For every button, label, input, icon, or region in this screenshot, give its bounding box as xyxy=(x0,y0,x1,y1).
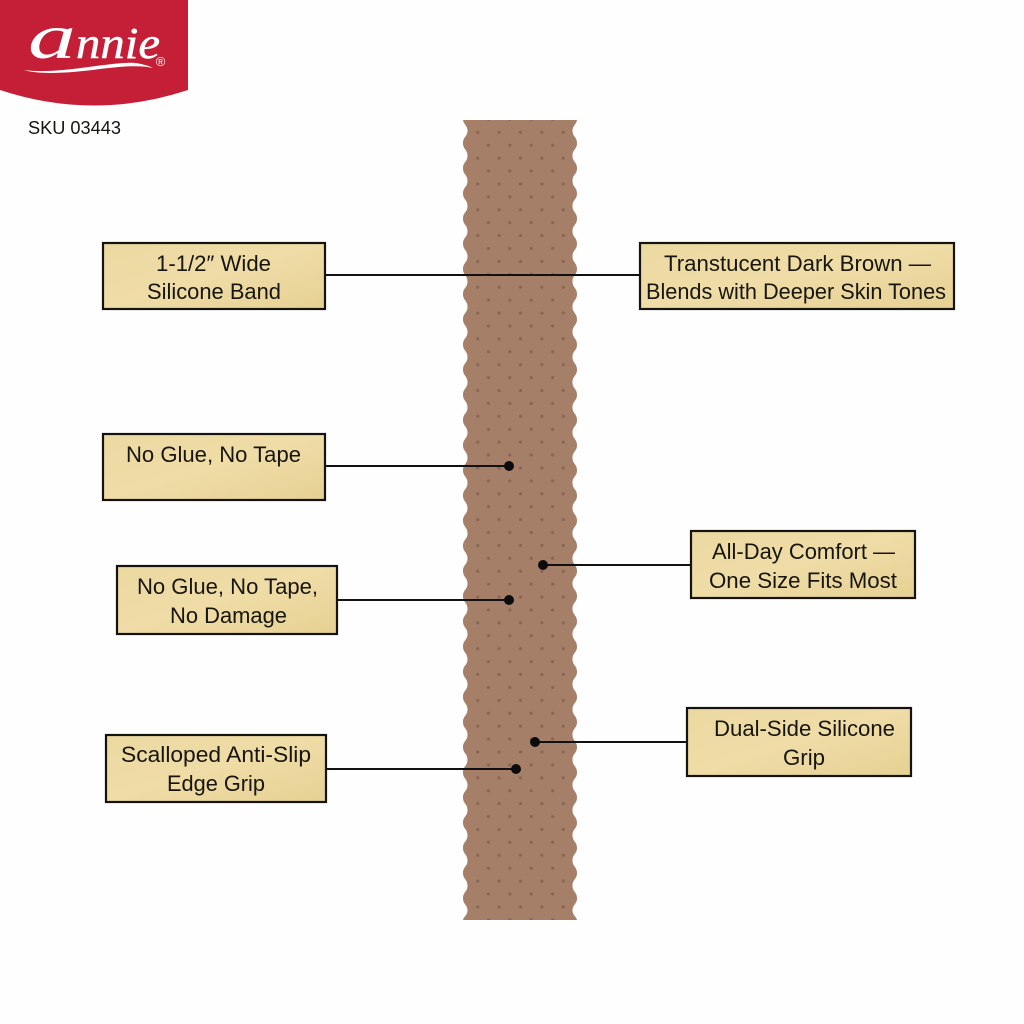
logo: Annie red badge xyxy=(0,0,188,106)
callout: dual-side silicone grip: Grip xyxy=(783,745,825,770)
silicone band with scalloped edges xyxy=(463,120,577,920)
pointer to band with dot xyxy=(325,461,514,471)
callout: 1-1/2 inch wide silicone band: Silicone Band xyxy=(147,279,281,304)
callout: scalloped anti-slip edge grip: Scalloped Anti-Slip xyxy=(121,742,311,767)
callout: scalloped anti-slip edge grip xyxy=(106,735,326,802)
callout: no glue, no tape, no damage xyxy=(117,566,337,634)
pointer to band with dot xyxy=(326,764,521,774)
logo wordmark xyxy=(28,1,160,72)
callout: all-day comfort xyxy=(691,531,915,598)
registered mark: ® xyxy=(156,54,166,69)
callout: no glue, no tape: No Glue, No Tape xyxy=(126,442,301,467)
pointer to band with dot xyxy=(530,737,687,747)
callout: scalloped anti-slip edge grip: Edge Grip xyxy=(167,771,265,796)
logo wordmark: a xyxy=(28,1,76,72)
callout: no glue, no tape, no damage: No Glue, No Tape, xyxy=(137,574,318,599)
callout: no glue, no tape, no damage: No Damage xyxy=(170,603,287,628)
callout: dual-side silicone grip xyxy=(687,708,911,776)
callout: 1-1/2 inch wide silicone band xyxy=(103,243,325,309)
pointer to band with dot xyxy=(538,560,691,570)
SKU label: SKU 03443 xyxy=(28,118,121,138)
callout: translucent dark brown xyxy=(640,243,954,309)
callout: all-day comfort: All-Day Comfort — xyxy=(712,539,895,564)
pointer to band with dot xyxy=(337,595,514,605)
callout: translucent dark brown: Blends with Deeper Skin Tones xyxy=(646,279,946,304)
logo wordmark: nnie xyxy=(76,19,160,68)
callout: no glue, no tape xyxy=(103,434,325,500)
connector across band xyxy=(325,274,640,276)
callout: translucent dark brown: Transtucent Dark Brown — xyxy=(664,251,931,276)
callout: 1-1/2 inch wide silicone band: 1-1/2″ Wide xyxy=(156,251,271,276)
callout: dual-side silicone grip: Dual-Side Silicone xyxy=(714,716,895,741)
logo swoosh xyxy=(24,63,153,73)
callout: all-day comfort: One Size Fits Most xyxy=(709,568,897,593)
